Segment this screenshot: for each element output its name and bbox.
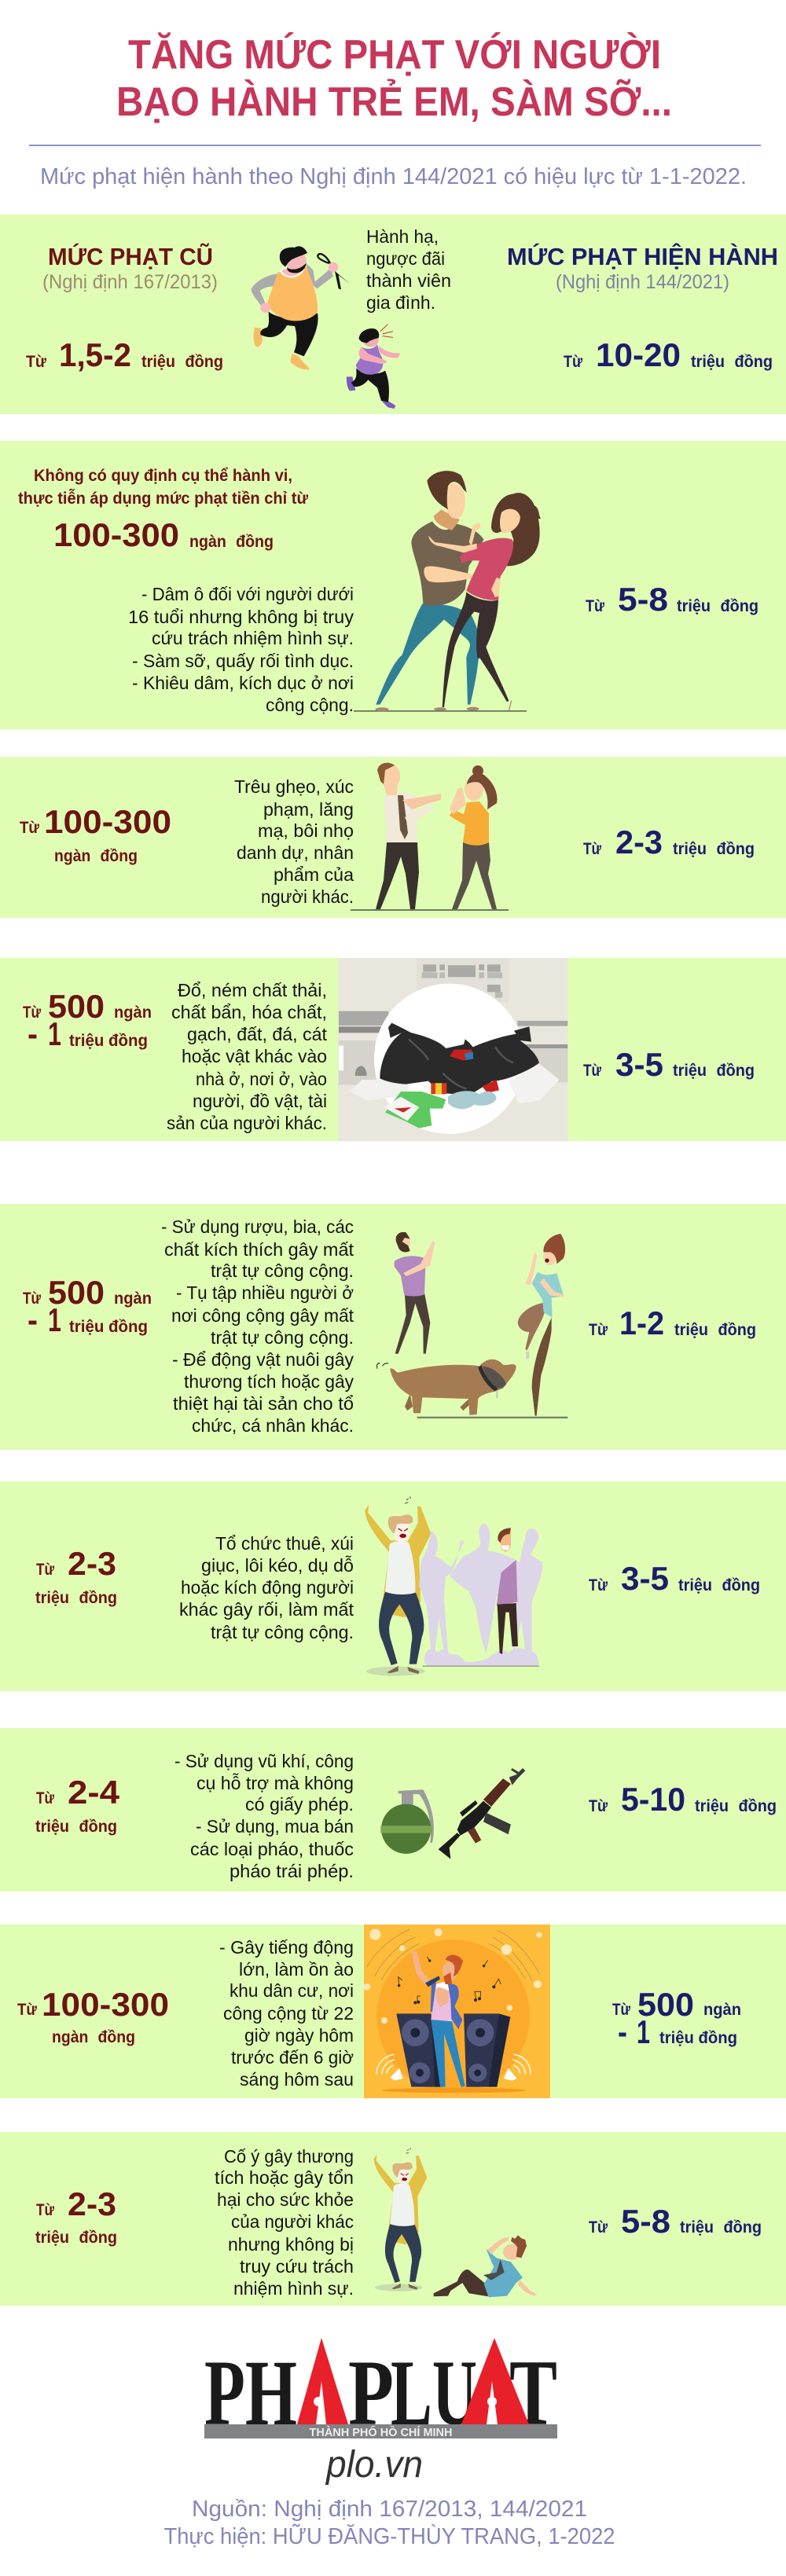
- current penalty value: 10-20: [596, 336, 681, 373]
- current penalty: Từ: [589, 1797, 608, 1815]
- old penalty value: triệu đồng: [141, 353, 223, 371]
- old penalty: triệu đồng: [35, 1818, 117, 1836]
- behavior text: [161, 1216, 354, 1436]
- current penalty: triệu đồng: [680, 2218, 762, 2237]
- logo: Pháp Luật: T: [509, 2340, 557, 2445]
- current penalty: Từ: [612, 2001, 631, 2019]
- behavior text: người, đồ vật, tài: [193, 1091, 327, 1111]
- current penalty: triệu đồng: [695, 1797, 777, 1815]
- old penalty value: [26, 336, 223, 373]
- old penalty: Không có quy định cụ thể hành vi,: [34, 467, 292, 485]
- panel: vũ khí, pháo: [0, 1728, 786, 1892]
- title: [116, 32, 672, 125]
- old penalty: 2-4: [68, 1774, 120, 1811]
- logo: Pháp Luật: LU: [391, 2340, 477, 2445]
- current penalty: triệu đồng: [674, 1321, 756, 1339]
- current penalty: triệu đồng: [659, 2029, 737, 2047]
- old penalty: -: [28, 1301, 38, 1338]
- behavior text: sản của người khác.: [167, 1113, 327, 1133]
- old penalty: Từ: [36, 2201, 55, 2219]
- behavior text: [215, 2146, 354, 2299]
- logo: Pháp Luật: [204, 2338, 557, 2445]
- current penalty: Từ: [583, 840, 602, 858]
- behavior text: thành viên: [366, 270, 451, 291]
- behavior text: danh dự, nhân: [237, 842, 354, 863]
- old penalty: triệu đồng: [69, 1032, 148, 1050]
- old penalty: triệu đồng: [35, 1589, 117, 1607]
- behavior text: [234, 776, 354, 907]
- behavior text: Hành hạ,: [366, 226, 439, 247]
- behavior text: gia đình.: [366, 292, 435, 313]
- behavior text: hoặc kích động người: [181, 1577, 354, 1598]
- old penalty value: 1,5-2: [59, 336, 131, 373]
- behavior text: công cộng.: [266, 695, 354, 715]
- old penalty: [18, 467, 309, 553]
- old penalty: Từ: [36, 1789, 55, 1807]
- current penalty: 5-8: [618, 581, 668, 618]
- behavior text: ngược đãi: [366, 248, 445, 269]
- current penalty: triệu đồng: [673, 840, 755, 858]
- current penalty: triệu đồng: [677, 597, 758, 615]
- old penalty heading: (Nghị định 167/2013): [42, 271, 218, 293]
- behavior text: Cố ý gây thương: [224, 2146, 354, 2167]
- current penalty: Từ: [589, 1321, 608, 1339]
- current penalty: ngàn: [703, 2001, 741, 2019]
- behavior text: giục, lôi kéo, dụ dỗ: [201, 1555, 354, 1576]
- old penalty: Từ: [23, 1004, 42, 1022]
- panel: gây rối trật tự: [0, 1481, 786, 1691]
- behavior text: Trêu ghẹo, xúc: [234, 776, 354, 797]
- behavior text: tích hoặc gây tổn: [215, 2167, 354, 2188]
- old penalty: triệu đồng: [35, 2229, 117, 2247]
- title: TĂNG MỨC PHẠT VỚI NGƯỜI: [128, 32, 661, 78]
- current penalty: [589, 2203, 762, 2240]
- behavior text: khu dân cư, nơi: [230, 1980, 354, 2001]
- behavior text: công cộng từ 22: [223, 2003, 354, 2024]
- behavior text: [366, 226, 451, 313]
- current penalty: [583, 824, 755, 861]
- old penalty: [23, 1274, 152, 1338]
- current penalty: [589, 1560, 760, 1597]
- behavior text: hoặc vật khác vào: [182, 1046, 327, 1066]
- illustration: grenade and rifle: [380, 1768, 525, 1859]
- old penalty: 2-3: [68, 1545, 116, 1582]
- current penalty: [589, 1781, 777, 1818]
- old penalty heading: [42, 242, 218, 293]
- illustration: man grabbing woman: [354, 471, 541, 712]
- old penalty: [20, 803, 171, 865]
- behavior text: trật tự công cộng.: [211, 1327, 354, 1348]
- behavior text: Tổ chức thuê, xúi: [215, 1533, 354, 1554]
- behavior text: chức, cá nhân khác.: [192, 1415, 354, 1436]
- behavior text: các loại pháo, thuốc: [190, 1839, 354, 1859]
- behavior text: [167, 980, 328, 1133]
- current penalty: 5-10: [621, 1781, 685, 1818]
- current penalty: 1: [637, 2013, 650, 2050]
- behavior text: - Sử dụng, mua bán: [196, 1816, 354, 1837]
- behavior text: thương tích hoặc gây: [184, 1371, 354, 1392]
- behavior text: trật tự công cộng.: [211, 1622, 354, 1642]
- current penalty heading: [507, 242, 778, 293]
- behavior text: pháo trái phép.: [230, 1861, 354, 1881]
- behavior text: - Gây tiếng động: [219, 1937, 354, 1958]
- old penalty: Từ: [36, 1561, 55, 1579]
- old penalty: 500: [48, 1274, 105, 1311]
- old penalty: triệu đồng: [69, 1318, 148, 1336]
- behavior text: - Sàm sỡ, quấy rối tình dục.: [132, 651, 354, 671]
- behavior text: gạch, đất, đá, cát: [187, 1024, 328, 1044]
- current penalty: triệu đồng: [678, 1576, 760, 1594]
- old penalty: 100-300: [53, 516, 179, 553]
- old penalty: thực tiễn áp dụng mức phạt tiền chỉ từ: [18, 489, 309, 508]
- behavior text: - Sử dụng vũ khí, công: [174, 1751, 354, 1771]
- old penalty: ngàn: [114, 1290, 152, 1308]
- illustration: man harassing woman: [351, 763, 509, 911]
- illustration: attacker and fallen man: [374, 2148, 537, 2297]
- logo: Pháp Luật: PH: [204, 2340, 297, 2445]
- subtitle: Mức phạt hiện hành theo Nghị định 144/2021 có hiệu lực từ 1-1-2022.: [40, 164, 747, 189]
- behavior text: Đổ, ném chất thải,: [178, 980, 327, 1000]
- old penalty: Từ: [23, 1290, 42, 1308]
- current penalty heading: (Nghị định 144/2021): [556, 271, 729, 293]
- old penalty: ngàn đồng: [54, 847, 138, 865]
- behavior text: - Dâm ô đối với người dưới: [141, 584, 354, 604]
- current penalty: 3-5: [621, 1560, 669, 1597]
- old penalty: [23, 988, 152, 1052]
- behavior text: giờ ngày hôm: [244, 2025, 354, 2046]
- panel: header row, hành hạ gia đình: [0, 215, 786, 414]
- old penalty heading: MỨC PHẠT CŨ: [48, 242, 213, 270]
- current penalty: [612, 1986, 741, 2050]
- old penalty: ngàn đồng: [189, 533, 274, 551]
- behavior text: cứu trách nhiệm hình sự.: [152, 628, 354, 648]
- old penalty: 100-300: [42, 1986, 169, 2023]
- behavior text: nơi công cộng gây mất: [171, 1305, 354, 1326]
- behavior text: người khác.: [261, 886, 354, 907]
- illustration: man chasing child with whip: [251, 246, 400, 409]
- behavior text: hại cho sức khỏe: [217, 2189, 354, 2210]
- current penalty: triệu đồng: [673, 1062, 755, 1080]
- current penalty: [583, 1046, 755, 1083]
- behavior text: nhưng không bị: [228, 2234, 354, 2255]
- behavior text: của người khác: [231, 2211, 354, 2232]
- current penalty: 3-5: [615, 1046, 663, 1083]
- behavior text: 16 tuổi nhưng không bị truy: [128, 607, 354, 627]
- current penalty: [586, 581, 758, 618]
- current penalty: 5-8: [621, 2203, 670, 2240]
- behavior text: [219, 1937, 354, 2090]
- old penalty: 1: [48, 1015, 61, 1052]
- panel: tiếng ồn: [0, 1925, 786, 2098]
- current penalty: Từ: [583, 1062, 602, 1080]
- panel: trêu ghẹo: [0, 757, 786, 918]
- current penalty heading: MỨC PHẠT HIỆN HÀNH: [507, 242, 778, 270]
- behavior text: - Tụ tập nhiều người ở: [176, 1282, 354, 1303]
- current penalty: -: [618, 2013, 627, 2050]
- behavior text: trật tự công cộng.: [211, 1260, 354, 1281]
- behavior text: [128, 584, 354, 715]
- illustration: instigator and crowd: [365, 1496, 542, 1676]
- behavior text: lớn, làm ồn ào: [239, 1959, 354, 1980]
- current penalty: Từ: [586, 597, 605, 615]
- illustration: singer and speakers: [363, 1925, 550, 2098]
- old penalty: 100-300: [44, 803, 171, 840]
- source and credits: Nguồn: Nghị định 167/2013, 144/2021: [192, 2497, 587, 2522]
- behavior text: chất bẩn, hóa chất,: [171, 1002, 327, 1022]
- behavior text: có giấy phép.: [245, 1794, 354, 1815]
- illustration: garbage bags: [338, 958, 567, 1141]
- old penalty: Từ: [20, 819, 40, 837]
- behavior text: sáng hôm sau: [240, 2069, 354, 2090]
- behavior text: [179, 1533, 354, 1642]
- behavior text: - Để động vật nuôi gây: [172, 1349, 354, 1370]
- current penalty: Từ: [589, 2218, 608, 2237]
- behavior text: - Khiêu dâm, kích dục ở nơi: [132, 673, 354, 693]
- panel: rượu bia, vật nuôi: [0, 1204, 786, 1450]
- behavior text: cụ hỗ trợ mà không: [196, 1773, 354, 1793]
- behavior text: mạ, bôi nhọ: [258, 820, 354, 841]
- behavior text: - Sử dụng rượu, bia, các: [161, 1216, 354, 1237]
- source and credits: [163, 2497, 615, 2549]
- behavior text: trước đến 6 giờ: [231, 2047, 354, 2068]
- logo: Pháp Luật: THÀNH PHỐ HỒ CHÍ MINH: [310, 2425, 453, 2439]
- current penalty value: [564, 336, 773, 373]
- old penalty: 1: [48, 1301, 61, 1338]
- old penalty: 500: [48, 988, 105, 1025]
- old penalty: [35, 1545, 117, 1607]
- behavior text: nhiệm hình sự.: [233, 2278, 354, 2299]
- current penalty value: Từ: [564, 353, 583, 371]
- old penalty value: Từ: [26, 353, 47, 371]
- behavior text: truy cứu trách: [240, 2256, 354, 2277]
- behavior text: nhà ở, nơi ở, vào: [196, 1069, 327, 1089]
- old penalty: [35, 2185, 117, 2247]
- current penalty: 1-2: [619, 1305, 664, 1341]
- behavior text: khác gây rối, làm mất: [179, 1599, 354, 1620]
- behavior text: phạm, lăng: [263, 799, 354, 820]
- illustration: dog, man and woman: [376, 1232, 567, 1418]
- old penalty: ngàn: [114, 1004, 152, 1022]
- panel: sàm sỡ: [0, 441, 786, 729]
- title: BẠO HÀNH TRẺ EM, SÀM SỠ...: [116, 79, 672, 125]
- old penalty: [35, 1774, 120, 1836]
- old penalty: -: [28, 1015, 38, 1052]
- website: plo.vn: [325, 2444, 423, 2486]
- old penalty: [17, 1986, 169, 2046]
- panel: gây thương tích: [0, 2132, 786, 2306]
- old penalty: Từ: [17, 2001, 38, 2019]
- behavior text: phẩm của: [274, 864, 354, 885]
- source and credits: Thực hiện: HỮU ĐĂNG-THÙY TRANG, 1-2022: [163, 2523, 615, 2549]
- behavior text: chất kích thích gây mất: [164, 1239, 354, 1260]
- old penalty: 2-3: [68, 2185, 116, 2222]
- current penalty value: triệu đồng: [691, 353, 773, 371]
- panel: đổ chất thải: [0, 958, 786, 1141]
- old penalty: ngàn đồng: [52, 2028, 135, 2046]
- logo: Pháp Luật: P: [348, 2340, 394, 2445]
- current penalty: [589, 1305, 756, 1341]
- current penalty: 500: [637, 1986, 694, 2023]
- current penalty: 2-3: [615, 824, 663, 861]
- current penalty: Từ: [589, 1576, 608, 1594]
- behavior text: thiệt hại tài sản cho tổ: [173, 1393, 354, 1414]
- behavior text: [174, 1751, 354, 1881]
